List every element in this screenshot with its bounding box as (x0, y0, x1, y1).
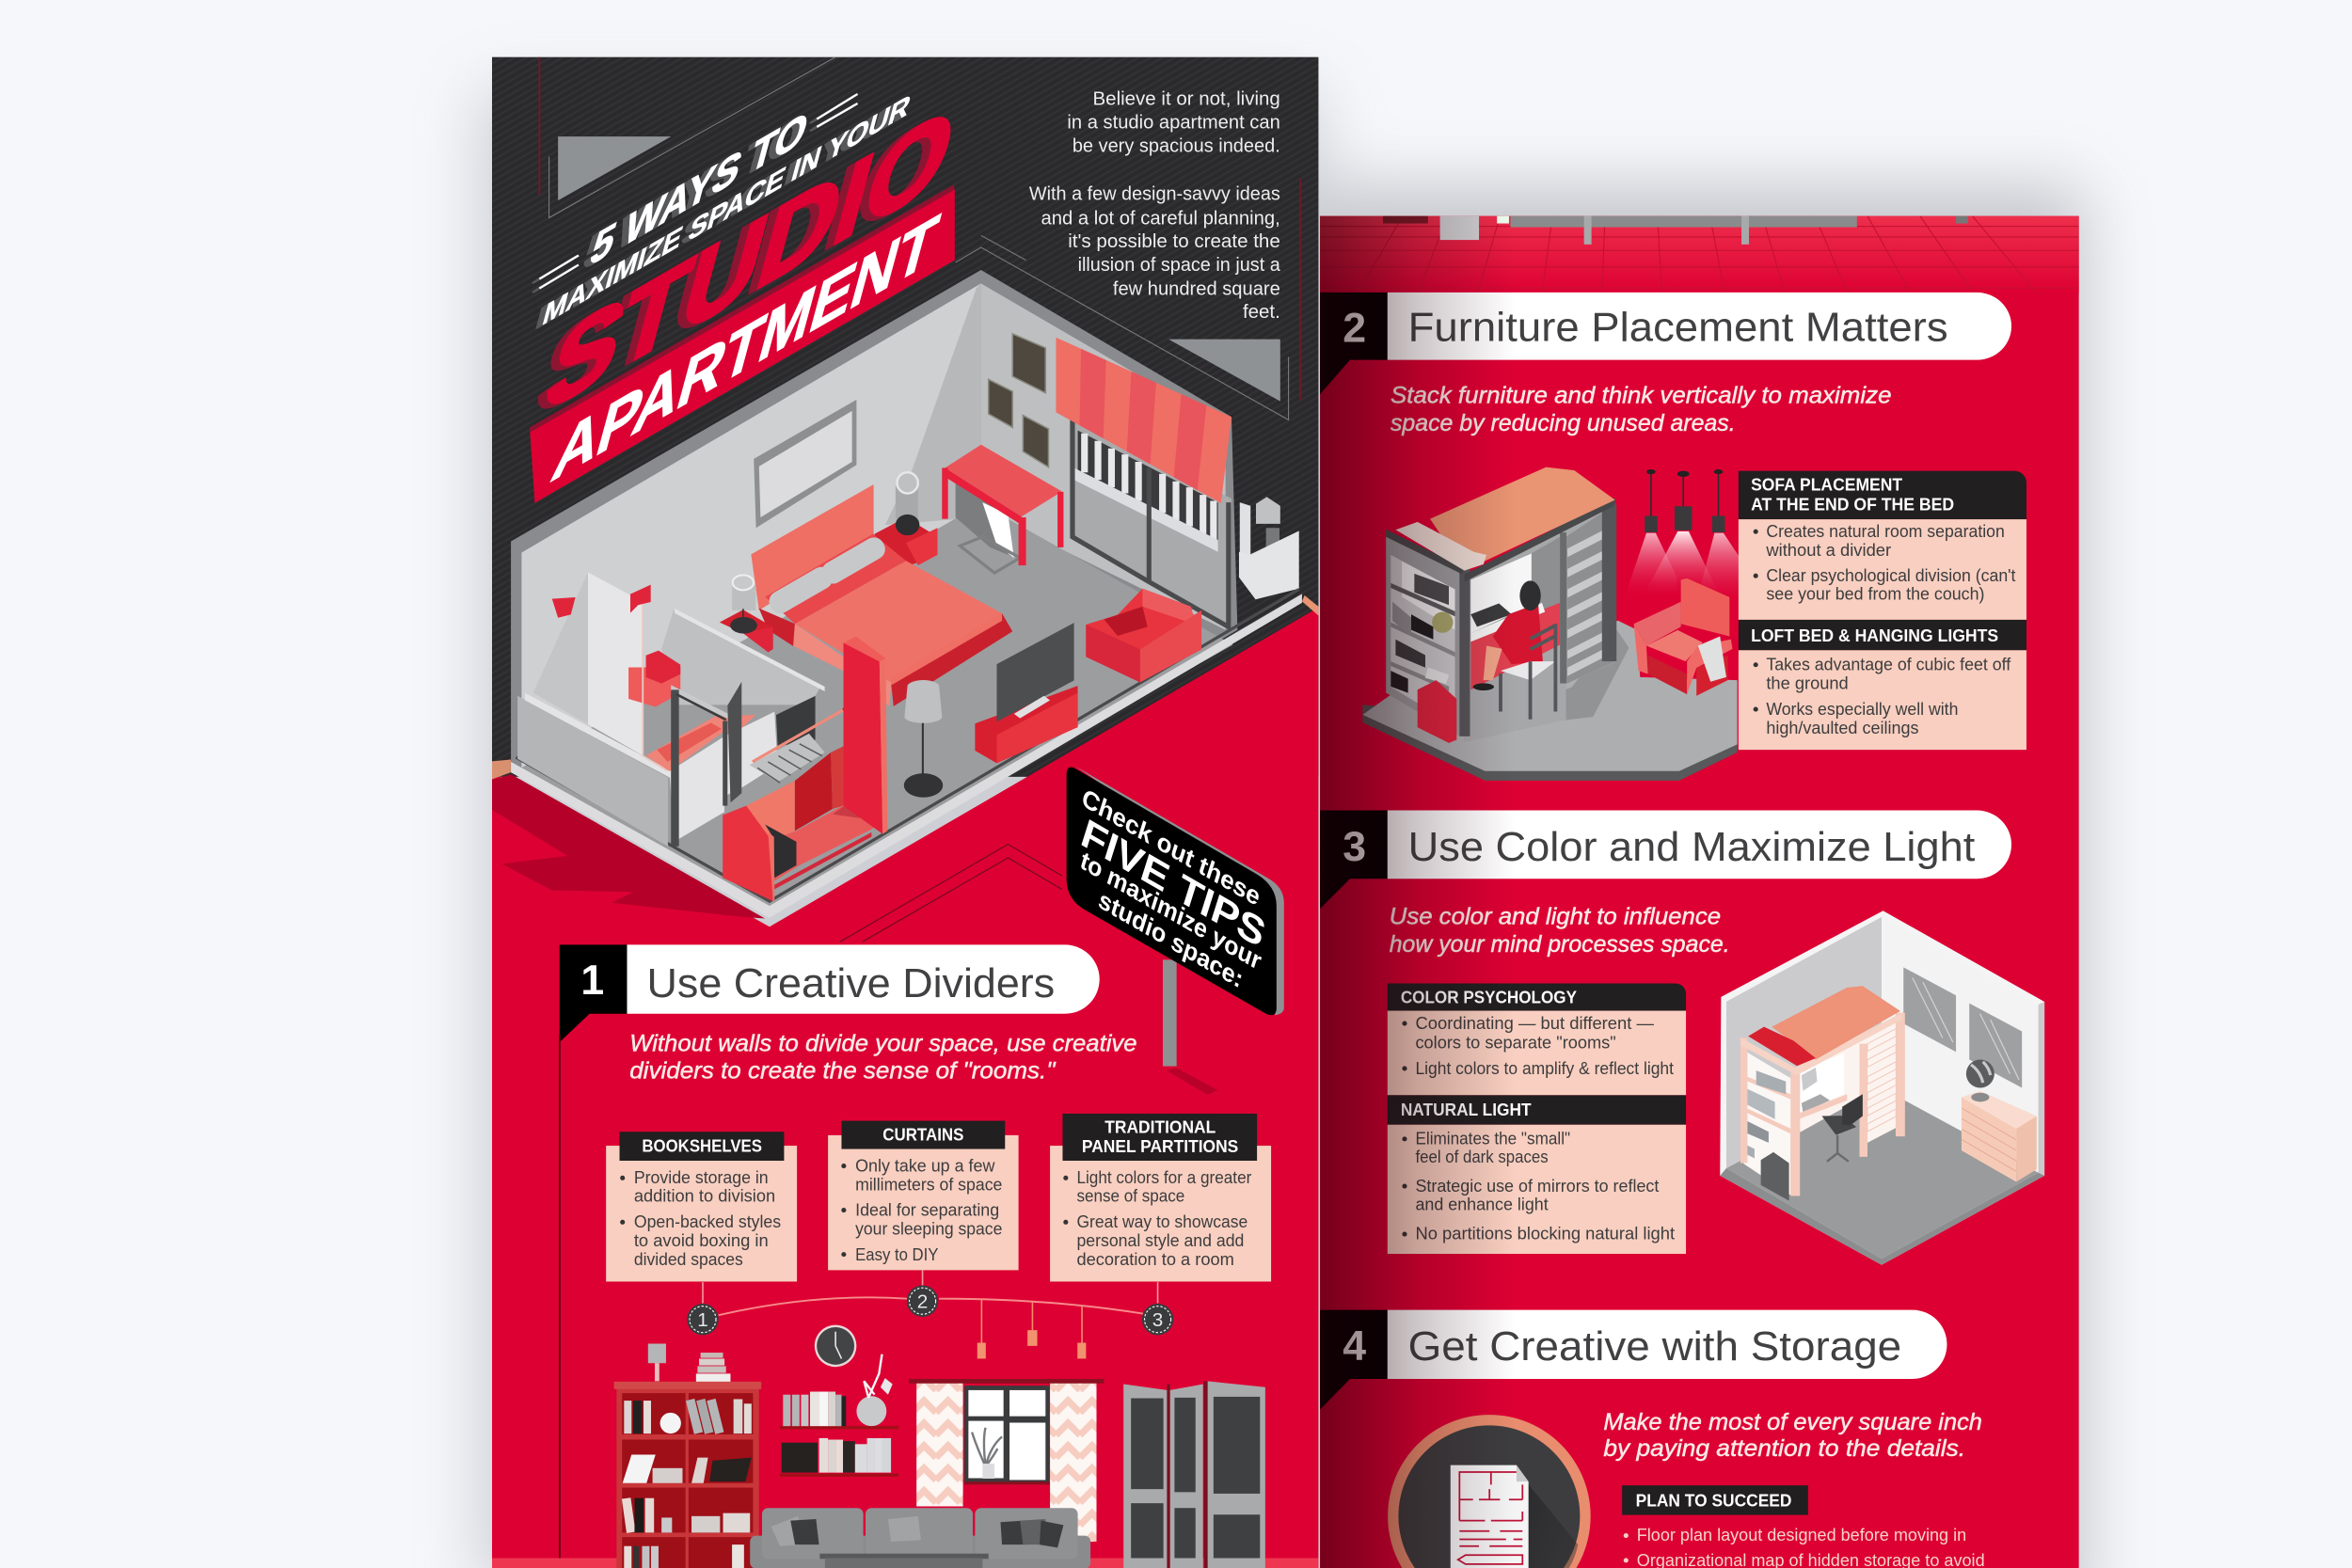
intro text: feet. (1243, 301, 1280, 323)
panel: sofa placement and loft bed notes: Creates natural room separation (1766, 521, 2005, 541)
wall clock (815, 1325, 856, 1367)
window with curtains (909, 1379, 1104, 1542)
outer walls (511, 270, 1237, 909)
balcony glass doors (1070, 416, 1232, 628)
heading: section 3 (1320, 811, 2011, 909)
card: traditional panel partitions: personal style and add (1076, 1230, 1244, 1250)
intro text: it's possible to create the (1068, 230, 1280, 252)
section 3 intro: how your mind processes space. (1390, 932, 1730, 958)
TV on red stand (975, 623, 1078, 763)
section 2 intro: space by reducing unused areas. (1391, 411, 1736, 436)
intro text: few hundred square (1113, 277, 1280, 299)
sign: five tips (1067, 767, 1284, 1095)
line: maximize space in your: MAXIMIZE SPACE IN YOUR (539, 87, 914, 333)
heading: section 1 (560, 944, 1100, 1042)
card: curtains: Only take up a few (855, 1156, 995, 1176)
panel: color psychology and natural light notes: COLOR PSYCHOLOGY (1401, 988, 1577, 1007)
bookshelf (614, 1343, 761, 1568)
section 2 intro: Stack furniture and think vertically to maximize (1391, 383, 1891, 408)
red lower background (492, 608, 1318, 1568)
wall pictures (989, 334, 1048, 467)
icon: floor plan document in circle (1388, 1415, 1591, 1568)
desk and chair (942, 445, 1063, 573)
label: plan to succeed: PLAN TO SUCCEED (1636, 1491, 1791, 1511)
shadow wedge (885, 283, 981, 525)
connector arc with numbered markers (687, 1270, 1173, 1358)
base band (511, 594, 1302, 918)
floor lamp (904, 680, 943, 798)
connector arc with numbered markers: 2 (917, 1291, 928, 1313)
label: plan to succeed (1622, 1485, 1808, 1515)
heading: section 1: 1 (580, 958, 604, 1004)
loft bed pale (1740, 986, 1905, 1201)
intro text: in a studio apartment can (1067, 112, 1280, 134)
nightstand right with lamp (875, 472, 938, 567)
plan to succeed bullets: Floor plan layout designed before moving in (1637, 1525, 1966, 1544)
heading: section 4 (1320, 1310, 1947, 1410)
heading: section 3: Use Color and Maximize Light (1408, 824, 1975, 870)
card: bookshelves: addition to division (634, 1186, 775, 1206)
heading: section 2: 2 (1343, 306, 1366, 352)
intro text (1029, 88, 1280, 323)
desk chair (1822, 1116, 1856, 1135)
panel: color psychology and natural light notes: Light colors to amplify & reflect light (1415, 1058, 1674, 1078)
title block (530, 78, 969, 503)
title band shadow line (530, 184, 955, 435)
card: traditional panel partitions: Great way to showcase (1076, 1212, 1248, 1231)
back left wall (521, 283, 981, 768)
connector arc with numbered markers: 3 (1152, 1309, 1163, 1331)
thin path lines to sign (840, 845, 1062, 942)
panel: sofa placement and loft bed notes: LOFT BED & HANGING LIGHTS (1751, 626, 1998, 645)
intro text: be very spacious indeed. (1073, 135, 1280, 157)
floor corners (492, 760, 511, 780)
connector arc with numbered markers: 1 (697, 1309, 708, 1331)
section 1 intro (629, 1032, 1137, 1084)
illustration: bright room with loft bed (1720, 911, 2044, 1265)
intro text: and a lot of careful planning, (1041, 207, 1280, 229)
card: traditional panel partitions: decoration to a room (1076, 1249, 1234, 1269)
illustration floor (492, 1558, 1318, 1568)
card: traditional panel partitions (1050, 1114, 1271, 1281)
armchair (1086, 589, 1201, 682)
panel: sofa placement and loft bed notes: without a divider (1765, 540, 1891, 560)
panel: color psychology and natural light notes: Coordinating — but different — (1415, 1013, 1655, 1033)
card: curtains (828, 1121, 1019, 1270)
headboard (751, 484, 874, 610)
card: bookshelves: Open-backed styles (634, 1212, 781, 1231)
panel: sofa placement and loft bed notes: the ground (1766, 673, 1849, 692)
mirror (754, 400, 856, 528)
panel: sofa placement and loft bed notes: Takes advantage of cubic feet off (1766, 655, 2011, 674)
room drop shadow (492, 774, 765, 919)
section 1 intro: dividers to create the sense of "rooms." (629, 1058, 1057, 1084)
section 4 intro: by paying attention to the details. (1603, 1436, 1965, 1462)
card: curtains: millimeters of space (855, 1175, 1002, 1195)
card: traditional panel partitions: Light colors for a greater (1076, 1167, 1251, 1187)
line: 5 ways to: 5 WAYS TO (585, 101, 814, 277)
panel: color psychology and natural light notes: Eliminates the "small" (1415, 1128, 1570, 1148)
ladder shelves (1566, 504, 1615, 684)
panel shadows (480, 90, 2085, 1568)
panel: sofa placement and loft bed notes: Clear psychological division (can't (1766, 565, 2015, 585)
card: bookshelves: BOOKSHELVES (642, 1135, 762, 1155)
panel: left infographic sheet (492, 57, 1318, 1568)
sign: five tips: FIVE TIPS (1076, 810, 1270, 956)
floor corners right (1302, 595, 1318, 615)
sofa (750, 1508, 1090, 1568)
panel: color psychology and natural light notes: NATURAL LIGHT (1401, 1100, 1532, 1119)
heading: section 2 (1320, 293, 2011, 394)
armchair (1634, 578, 1732, 696)
sign: five tips: studio space: (1095, 884, 1247, 994)
sign: five tips: Check out these (1078, 783, 1263, 911)
folding panel partition (1123, 1381, 1265, 1568)
bathroom (517, 572, 825, 847)
section 3 intro (1390, 905, 1730, 958)
card: bookshelves (606, 1132, 797, 1281)
panel: sofa placement and loft bed notes: see your bed from the couch) (1766, 584, 1984, 604)
decorative triangles and lines (539, 57, 1300, 420)
intro text: illusion of space in just a (1078, 254, 1280, 276)
illustration: loft bed and armchair (1362, 467, 1743, 781)
back right wall (981, 283, 1226, 630)
card: bookshelves: Provide storage in (634, 1167, 769, 1187)
card: bookshelves: to avoid boxing in (634, 1230, 769, 1250)
panel: sofa placement and loft bed notes: SOFA PLACEMENT (1751, 475, 1902, 495)
sign: five tips: to maximize your (1077, 846, 1264, 975)
illustration: isometric studio apartment (511, 270, 1302, 918)
loft bed frame (1386, 467, 1616, 743)
panel: sofa placement and loft bed notes: AT THE END OF THE BED (1751, 495, 1954, 515)
person at desk (1473, 580, 1543, 690)
panel: color psychology and natural light notes: colors to separate "rooms" (1415, 1032, 1616, 1052)
chair (1501, 624, 1555, 720)
floor (521, 504, 1233, 906)
intro text: Believe it or not, living (1093, 88, 1280, 110)
panel: sofa placement and loft bed notes: high/vaulted ceilings (1766, 718, 1918, 737)
section 3 intro: Use color and light to influence (1390, 905, 1721, 930)
furniture legs at top of sheet (1383, 216, 1968, 245)
partition with hanging clothes (723, 637, 887, 901)
section 4 intro (1603, 1410, 1982, 1462)
bed (759, 533, 1012, 706)
wall shelves with books (780, 1392, 898, 1477)
card: curtains: CURTAINS (882, 1124, 963, 1144)
section 1 intro: Without walls to divide your space, use creative (629, 1032, 1137, 1057)
panel: right infographic sheet (1320, 216, 2079, 1568)
section 1 rule (559, 1035, 561, 1568)
panel: color psychology and natural light notes: Strategic use of mirrors to reflect (1415, 1176, 1659, 1196)
heading: section 4: 4 (1343, 1323, 1366, 1370)
word: apartment: APARTMENT (545, 198, 946, 499)
word: studio: STUDIO (533, 78, 969, 439)
intro text: With a few design-savvy ideas (1029, 183, 1280, 205)
dresser and globe (1962, 1060, 2037, 1181)
panel: sofa placement and loft bed notes: Works especially well with (1766, 699, 1958, 719)
nightstand left with lamp (720, 575, 773, 652)
title band: apartment (530, 190, 955, 503)
tiled floor strip (1320, 216, 2079, 293)
card: traditional panel partitions: PANEL PARTITIONS (1082, 1136, 1238, 1156)
hanging lights (1629, 469, 1739, 592)
card: curtains: Easy to DIY (855, 1244, 938, 1264)
heading: section 4: Get Creative with Storage (1408, 1323, 1901, 1370)
heading: section 1: Use Creative Dividers (647, 960, 1055, 1006)
panel: color psychology and natural light notes: No partitions blocking natural light (1415, 1224, 1675, 1243)
panel: color psychology and natural light notes: and enhance light (1415, 1195, 1549, 1214)
section 4 intro: Make the most of every square inch (1603, 1410, 1982, 1435)
card: traditional panel partitions: TRADITIONAL (1104, 1117, 1216, 1136)
section 2 intro (1391, 383, 1891, 436)
heading: section 3: 3 (1343, 824, 1366, 870)
vase with dried branches (856, 1354, 893, 1426)
wall mirrors (1903, 967, 2022, 1088)
card: traditional panel partitions: sense of space (1076, 1186, 1184, 1206)
card: curtains: Ideal for separating (855, 1199, 999, 1219)
card: bookshelves: divided spaces (634, 1249, 743, 1269)
panel: sofa placement and loft bed notes (1739, 471, 2026, 750)
balcony equipment (1239, 497, 1299, 599)
panel: color psychology and natural light notes: feel of dark spaces (1415, 1147, 1549, 1166)
heading: section 2: Furniture Placement Matters (1408, 304, 1948, 350)
panel: color psychology and natural light notes (1388, 984, 1686, 1254)
plan to succeed bullets (1624, 1525, 1985, 1568)
curtain (1056, 338, 1232, 503)
card: curtains: your sleeping space (855, 1219, 1002, 1239)
